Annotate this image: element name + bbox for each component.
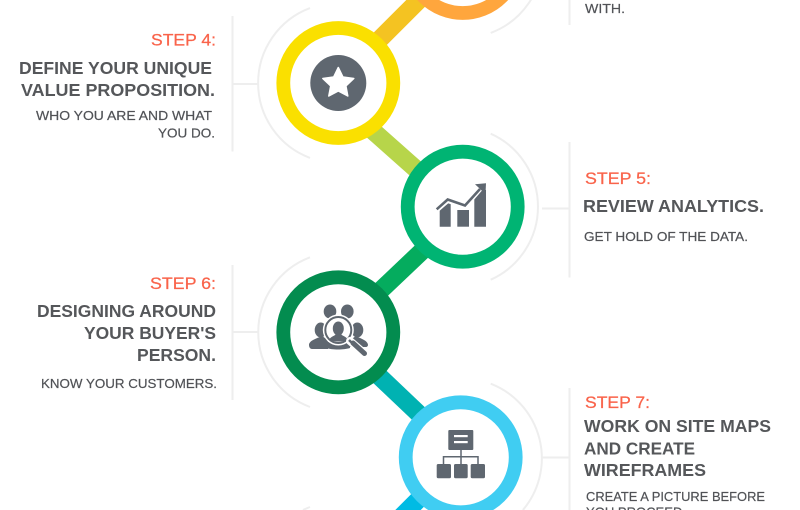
step 5 node with analytics icon: [408, 152, 518, 262]
step 4 heading: [19, 58, 215, 100]
text block: step 7: [584, 393, 771, 510]
step 4 heading: VALUE PROPOSITION.: [21, 80, 215, 100]
step 6 description: KNOW YOUR CUSTOMERS.: [41, 376, 217, 391]
connector: step 4 to step 5: [355, 115, 435, 186]
connector: step 6 to step 7: [360, 358, 440, 434]
step 4 node with star icon: [283, 28, 393, 138]
step 7 node with sitemap icon: [406, 402, 516, 510]
step 6 heading: [37, 301, 216, 365]
step 5 heading: REVIEW ANALYTICS.: [583, 196, 764, 216]
icon: growth chart: [437, 183, 486, 227]
icon: star badge: [310, 55, 366, 111]
connector: step 7 to step 8: [395, 472, 446, 510]
step 4 description: WHO YOU ARE AND WHAT: [36, 108, 212, 123]
step 4 description: [36, 108, 215, 140]
step 5 description: GET HOLD OF THE DATA.: [584, 229, 748, 244]
step 5 label: STEP 5:: [585, 169, 651, 188]
step 6 heading: DESIGNING AROUND: [37, 301, 216, 321]
step 6 label: STEP 6:: [150, 274, 216, 293]
step 6 node with buyer persona icon: [283, 277, 393, 387]
text block: step 5: [583, 169, 764, 244]
step 4 label: STEP 4:: [151, 30, 216, 50]
connector: step 5 to step 6: [362, 234, 440, 308]
step 3 ring: [408, 0, 518, 13]
step 4 heading: DEFINE YOUR UNIQUE: [19, 58, 212, 78]
step 7 heading: AND CREATE: [584, 439, 695, 459]
text block: step 6: [37, 274, 217, 391]
icon: sitemap hierarchy: [437, 430, 485, 478]
icon: people under magnifier: [309, 304, 368, 354]
step 4 description: YOU DO.: [158, 126, 215, 140]
step 7 heading: WORK ON SITE MAPS: [584, 416, 771, 436]
step 6 heading: YOUR BUYER'S: [84, 323, 216, 343]
step 7 heading: WIREFRAMES: [584, 460, 706, 480]
step 6 heading: PERSON.: [137, 345, 216, 365]
step 3 trailing text: WITH.: [585, 1, 625, 16]
text block: step 4: [19, 30, 216, 140]
step 7 description: CREATE A PICTURE BEFORE: [586, 489, 765, 504]
step 7 heading: [584, 416, 771, 480]
step 7 label: STEP 7:: [585, 393, 650, 412]
connector: step 3 to step 4: [350, 0, 425, 69]
